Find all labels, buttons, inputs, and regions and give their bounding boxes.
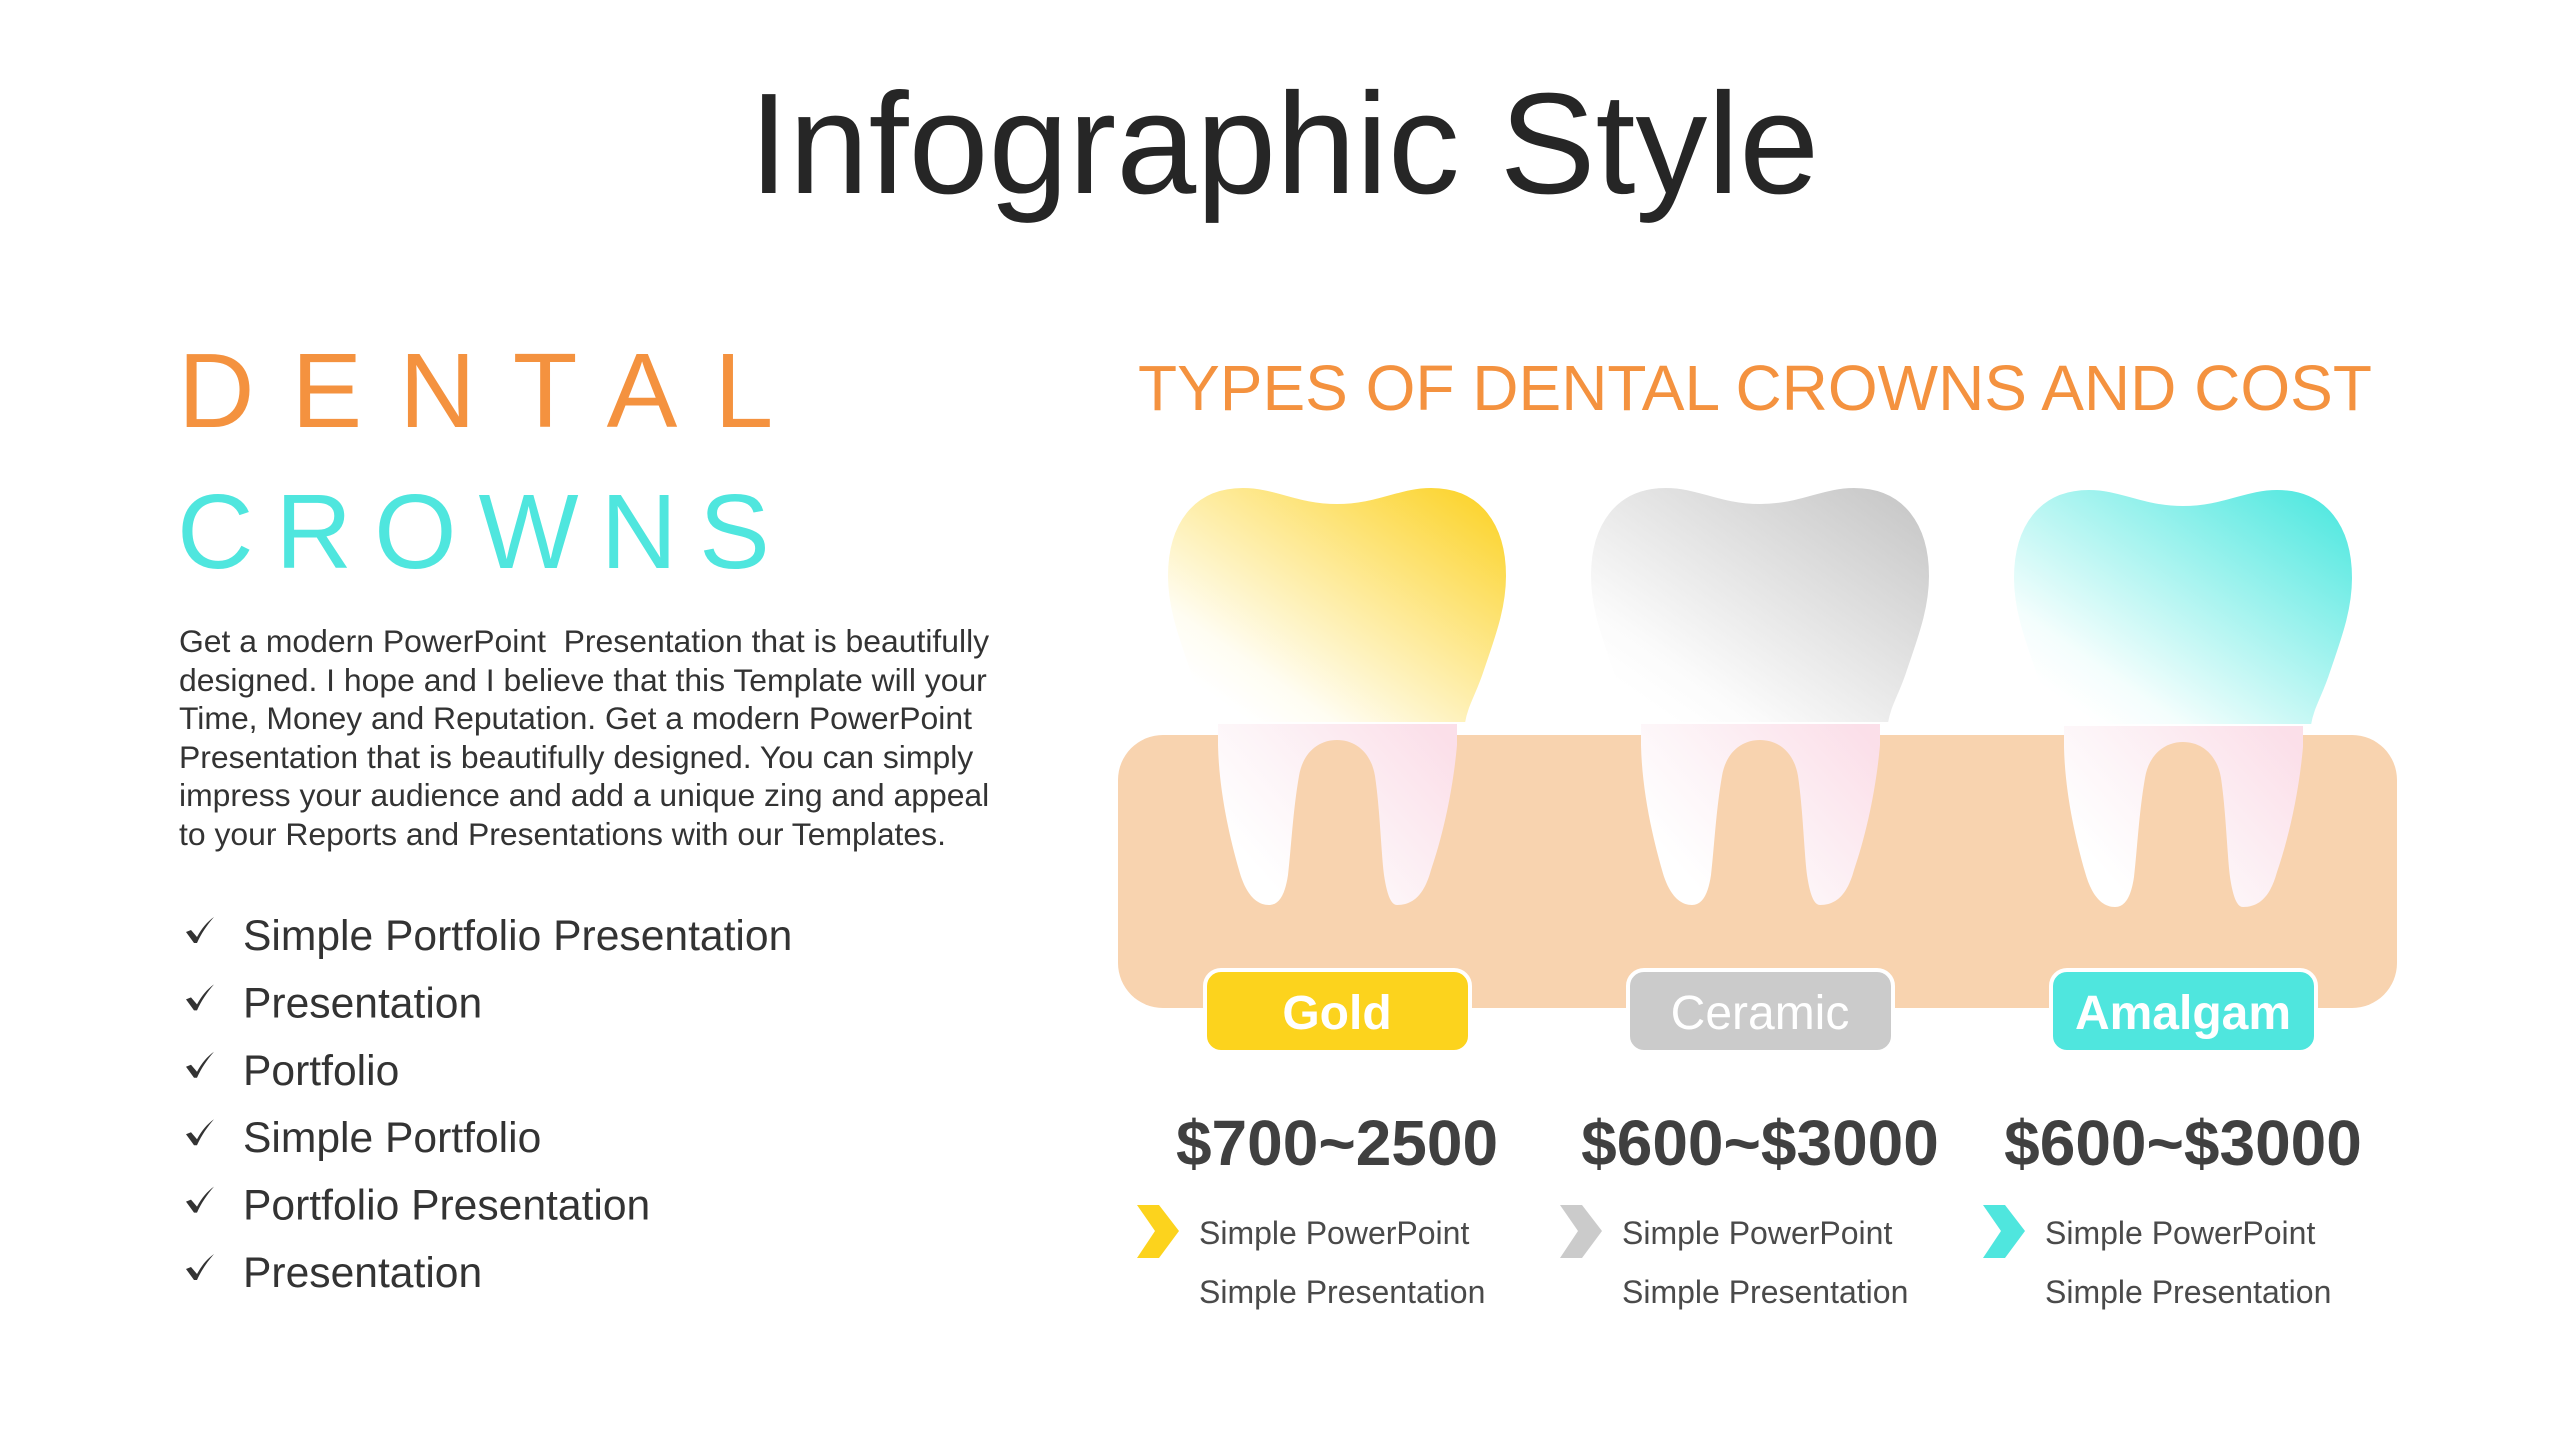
label: ceramic: Ceramic [1671,987,1849,1040]
label: gold: Gold [1282,987,1392,1040]
title: Infographic Style [749,64,1819,224]
check item 3: Portfolio [243,1047,399,1095]
icon: ceramic tooth [1590,487,1930,905]
text: amalgam notes: Simple Presentation [2045,1274,2331,1310]
text block: description: impress your audience and add a unique zing and appeal [179,777,989,813]
check item 5: Portfolio Presentation [243,1182,650,1230]
heading word: dental: DENTAL [178,332,810,450]
column: ceramic [1560,487,1939,1310]
text: amalgam notes [2045,1215,2331,1310]
heading: types and cost: TYPES OF DENTAL CROWNS AND COST [1138,352,2372,424]
price: ceramic: $600~$3000 [1581,1107,1939,1179]
icon: ceramic chevron [1560,1205,1602,1258]
checklist [186,912,792,1297]
label: gold [1205,970,1470,1052]
check item 1: Simple Portfolio Presentation [243,912,792,960]
heading: dental crowns [177,332,810,591]
price: gold: $700~2500 [1176,1107,1498,1179]
text: gold notes [1199,1215,1485,1310]
text: gold notes: Simple PowerPoint [1199,1215,1469,1251]
heading word: crowns: CROWNS [177,473,792,591]
text block: description: Get a modern PowerPoint Presentation that is beautifully [179,623,989,659]
text block: description: designed. I hope and I believe that this Template will your [179,662,987,698]
check item 2: Presentation [243,979,482,1027]
label: ceramic [1628,970,1893,1052]
check item 4: Simple Portfolio [243,1114,541,1162]
icon: amalgam tooth [2013,489,2353,907]
text block: description: to your Reports and Presentations with our Templates. [179,816,946,852]
label: amalgam [2051,970,2316,1052]
check item 6: Presentation [243,1249,482,1297]
text block: description [179,623,989,852]
text: amalgam notes: Simple PowerPoint [2045,1215,2315,1251]
column: gold [1137,487,1507,1310]
column: amalgam [1983,489,2362,1310]
label: amalgam: Amalgam [2075,987,2291,1040]
text: ceramic notes: Simple Presentation [1622,1274,1908,1310]
price: amalgam: $600~$3000 [2004,1107,2362,1179]
icon: gold tooth [1167,487,1507,905]
text: ceramic notes: Simple PowerPoint [1622,1215,1892,1251]
icon: amalgam chevron [1983,1205,2025,1258]
text block: description: Time, Money and Reputation. Get a modern PowerPoint [179,700,972,736]
icon: gold chevron [1137,1205,1179,1258]
gum panel [1118,735,2397,1008]
text block: description: Presentation that is beautifully designed. You can simply [179,739,973,775]
text: gold notes: Simple Presentation [1199,1274,1485,1310]
text: ceramic notes [1622,1215,1908,1310]
